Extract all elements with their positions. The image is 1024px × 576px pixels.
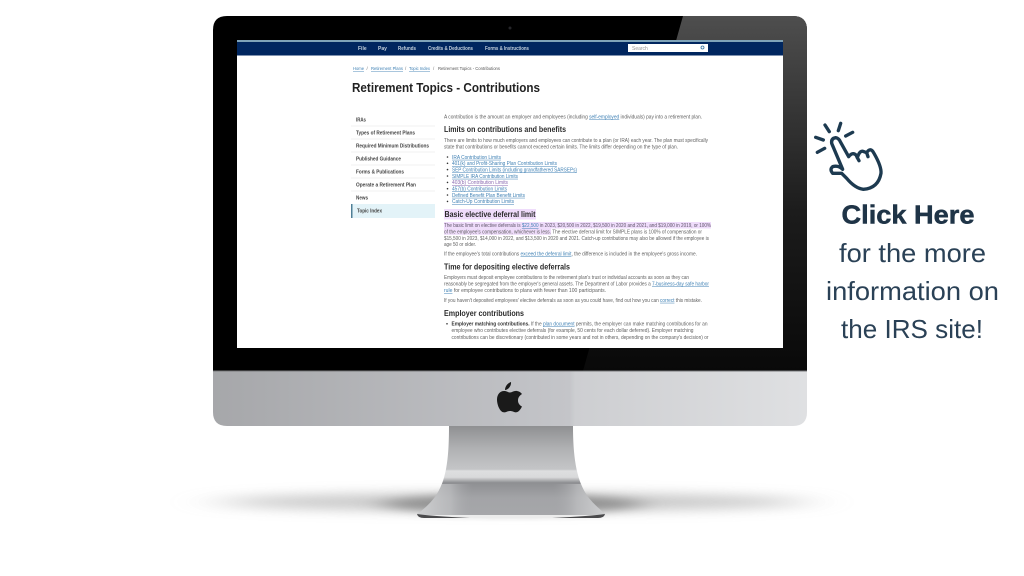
section: basic elective deferral limit (highlighted): of the employee's compensation, whichever is less. The elective deferral limit for SIMPLE plans is 100% of compensation or bbox=[444, 229, 702, 235]
call to action text: information on bbox=[826, 276, 999, 306]
section: employer contributions: contributions can be discretionary (contributed in some years and not in others, depending on the company's decision) or bbox=[452, 335, 709, 341]
section: limits on contributions bbox=[444, 125, 708, 150]
sidebar menu bbox=[351, 118, 435, 218]
navigation bar: Pay bbox=[378, 46, 387, 52]
intro text: A contribution is the amount an employer and employees (including self-employed individuals) pay into a retirement plan. bbox=[444, 114, 702, 120]
call to action text: Click Here bbox=[842, 200, 974, 230]
navigation bar: Forms & Instructions bbox=[485, 46, 529, 52]
call to action text: the IRS site! bbox=[841, 314, 983, 344]
list of contribution limit links: Defined Benefit Plan Benefit Limits bbox=[452, 193, 525, 199]
list of contribution limit links: SEP Contribution Limits (including grandfathered SARSEPs) bbox=[452, 167, 577, 173]
list of contribution limit links: 401(k) and Profit-Sharing Plan Contribution Limits bbox=[452, 161, 557, 167]
navigation bar: Refunds bbox=[398, 46, 416, 52]
sidebar menu: IRAs bbox=[356, 118, 366, 124]
sidebar menu: Operate a Retirement Plan bbox=[356, 182, 416, 188]
section: basic elective deferral limit (highlighted) bbox=[444, 209, 712, 257]
monitor floor shadow bbox=[217, 493, 807, 514]
section: basic elective deferral limit (highlighted): Basic elective deferral limit bbox=[444, 210, 536, 219]
breadcrumb: Home bbox=[353, 66, 364, 71]
section: employer contributions bbox=[444, 309, 709, 341]
page title: Retirement Topics - Contributions bbox=[352, 81, 540, 95]
breadcrumb: Retirement Topics - Contributions bbox=[438, 66, 501, 71]
section: time for depositing elective deferrals: If you haven't deposited employees' elective deferrals as soon as you could have, find out how you can correct this mistake. bbox=[444, 298, 702, 304]
section: time for depositing elective deferrals: reasonably be segregated from the employer's general assets. The Department of Labor provides a 7-business-day safe harbor bbox=[444, 282, 709, 288]
breadcrumb bbox=[353, 66, 501, 71]
breadcrumb: Retirement Plans bbox=[371, 66, 404, 71]
screen: IRS web page bbox=[237, 40, 783, 348]
call to action text: for the more bbox=[839, 238, 986, 268]
monitor bezel bbox=[213, 16, 807, 372]
call to action text bbox=[826, 200, 999, 344]
list of contribution limit links: Catch-Up Contribution Limits bbox=[452, 199, 514, 205]
section: basic elective deferral limit (highlighted): age 50 or older. bbox=[444, 242, 476, 248]
sidebar menu: Published Guidance bbox=[356, 156, 401, 162]
section: time for depositing elective deferrals: rule for employee contributions to plans with fewer than 100 participants. bbox=[444, 288, 606, 294]
navigation bar: File bbox=[358, 46, 367, 52]
monitor stand bbox=[417, 426, 605, 518]
list of contribution limit links: IRA Contribution Limits bbox=[452, 155, 501, 161]
section: basic elective deferral limit (highlighted): If the employee's total contributions exceed the deferral limit, the difference is included in the employee's gross income. bbox=[444, 251, 697, 257]
list of contribution limit links: 457(b) Contribution Limits bbox=[452, 186, 507, 192]
section: time for depositing elective deferrals bbox=[444, 262, 709, 304]
sidebar menu: Topic Index bbox=[357, 208, 382, 214]
breadcrumb: / bbox=[433, 66, 435, 71]
section: employer contributions: Employer matching contributions. If the plan document permits, the employer can make matching contributions for an bbox=[452, 322, 708, 328]
section: employer contributions: employee who contributes elective deferrals (for example, 50 cents for each dollar deferred). Employer matching bbox=[452, 328, 694, 334]
list of contribution limit links bbox=[447, 155, 577, 205]
infographic bbox=[212, 16, 998, 520]
sidebar menu: Types of Retirement Plans bbox=[356, 130, 415, 136]
navigation bar bbox=[237, 40, 783, 56]
breadcrumb: / bbox=[366, 66, 368, 71]
monitor chin bbox=[213, 371, 807, 426]
list of contribution limit links: 403(b) Contribution Limits bbox=[452, 180, 508, 186]
icon: clicking hand bbox=[816, 123, 881, 189]
section: basic elective deferral limit (highlighted): $15,500 in 2023, $14,000 in 2022, and $13,500 in 2020 and 2021. Catch-up contributions may also be allowed if the employee is bbox=[444, 236, 709, 242]
breadcrumb: Topic Index bbox=[409, 66, 431, 71]
section: limits on contributions: There are limits to how much employers and employees can contribute to a plan (or IRA) each year. The plan must specifically bbox=[444, 138, 708, 144]
breadcrumb: / bbox=[405, 66, 407, 71]
section: time for depositing elective deferrals: Employers must deposit employee contributions to the retirement plan's trust or individual accounts as soon as they can bbox=[444, 275, 689, 281]
navigation bar: Credits & Deductions bbox=[428, 46, 473, 52]
sidebar menu: Required Minimum Distributions bbox=[356, 144, 429, 150]
section: time for depositing elective deferrals: Time for depositing elective deferrals bbox=[444, 262, 570, 272]
section: limits on contributions: state that contributions or benefits cannot exceed certain limits. The limits differ depending on the type of plan. bbox=[444, 144, 678, 150]
navigation bar: Search bbox=[632, 46, 648, 52]
section: limits on contributions: Limits on contributions and benefits bbox=[444, 125, 566, 134]
icon: apple logo bbox=[497, 382, 522, 412]
sidebar menu: News bbox=[356, 196, 368, 202]
section: basic elective deferral limit (highlighted): The basic limit on elective deferrals is $22,500 in 2023, $20,500 in 2022, $19,500 in 2020 and 2021, and $19,000 in 2019, or 100% bbox=[444, 223, 712, 229]
section: employer contributions: Employer contributions bbox=[444, 309, 524, 318]
list of contribution limit links: SIMPLE IRA Contribution Limits bbox=[452, 174, 518, 180]
sidebar menu: Forms & Publications bbox=[356, 170, 404, 176]
